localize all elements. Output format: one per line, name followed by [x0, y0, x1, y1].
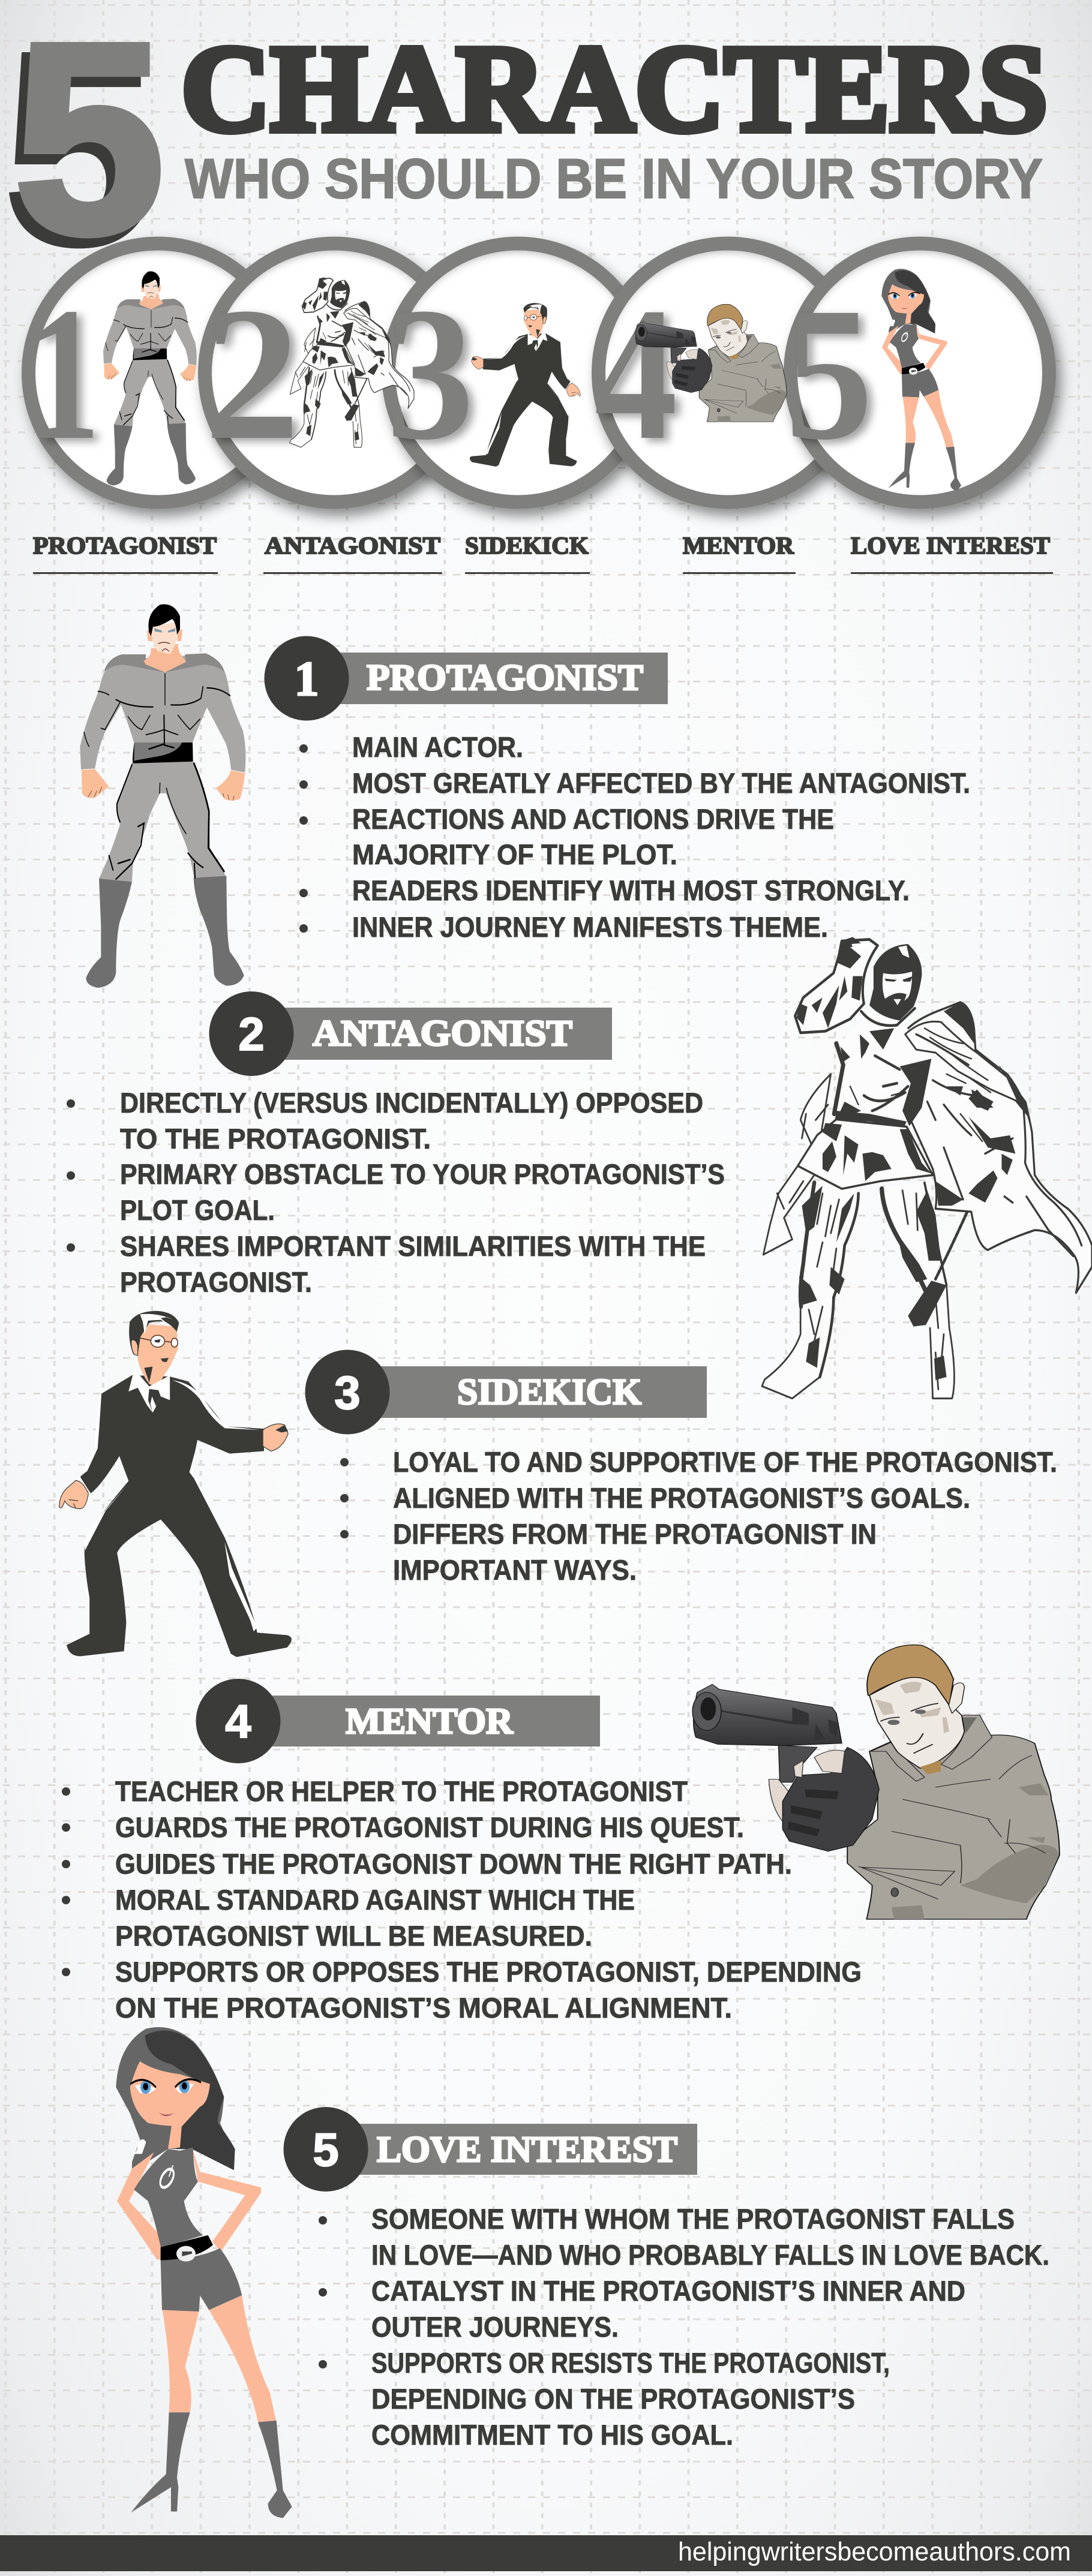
small figure: sidekick: [470, 303, 580, 467]
bullets: [67, 1099, 75, 1252]
heading: SIDEKICK: [457, 1372, 641, 1412]
text block: [115, 1775, 862, 2024]
text block: IMPORTANT WAYS.: [393, 1554, 637, 1586]
circle 3: [383, 244, 652, 513]
text block: PROTAGONIST WILL BE MEASURED.: [115, 1920, 592, 1952]
figure: protagonist: [80, 605, 245, 988]
footer url: helpingwritersbecomeauthors.com: [678, 2537, 1071, 2566]
number badge: [305, 1349, 390, 1435]
heading bar: [307, 653, 668, 704]
heading: characters: CHARACTERS: [181, 20, 1048, 157]
character labels row: MENTOR: [683, 532, 794, 559]
text block: PLOT GOAL.: [120, 1194, 275, 1226]
small figure: mentor: [635, 304, 787, 422]
text block: OUTER JOURNEYS.: [371, 2311, 619, 2343]
number badge: 2: [238, 1008, 265, 1060]
text block: SHARES IMPORTANT SIMILARITIES WITH THE: [120, 1230, 706, 1262]
text block: TO THE PROTAGONIST.: [120, 1123, 431, 1155]
character labels row: LOVE INTEREST: [851, 532, 1050, 559]
circle 4: [593, 244, 862, 513]
panel: sidekick: [305, 1349, 1057, 1586]
big numeral 5: 5: [5, 0, 155, 300]
circle 5: 5: [785, 268, 873, 479]
character labels row: ANTAGONIST: [265, 532, 440, 559]
numbered circles row: [23, 244, 1054, 513]
heading bar: [326, 2124, 697, 2175]
number badge: [264, 636, 349, 721]
bullets: [62, 1787, 70, 1976]
text block: [393, 1446, 1057, 1586]
circle 4: 4: [594, 268, 677, 479]
figure: antagonist: [762, 937, 1092, 1399]
panel: love interest: [283, 2107, 1049, 2451]
panel: antagonist: [67, 991, 725, 1298]
text block: INNER JOURNEY MANIFESTS THEME.: [352, 911, 828, 943]
circle 5: [785, 244, 1054, 513]
footer bar: [0, 2535, 1092, 2571]
figure: mentor: [692, 1645, 1060, 1919]
text block: [371, 2203, 1049, 2451]
text block: MORAL STANDARD AGAINST WHICH THE: [115, 1884, 635, 1916]
number badge: [209, 991, 294, 1076]
text block: MAIN ACTOR.: [352, 731, 523, 763]
text block: DIFFERS FROM THE PROTAGONIST IN: [393, 1518, 877, 1550]
figure: sidekick: [59, 1311, 292, 1657]
text block: GUARDS THE PROTAGONIST DURING HIS QUEST.: [115, 1811, 744, 1843]
text block: ALIGNED WITH THE PROTAGONIST’S GOALS.: [393, 1482, 970, 1514]
circle 1: 1: [28, 268, 100, 479]
text block: REACTIONS AND ACTIONS DRIVE THE: [352, 803, 834, 835]
heading: PROTAGONIST: [367, 658, 643, 698]
text block: TEACHER OR HELPER TO THE PROTAGONIST: [115, 1775, 688, 1807]
circle 2: [200, 244, 469, 513]
text block: [120, 1087, 725, 1298]
number badge: 5: [313, 2123, 339, 2176]
small figure: love interest: [881, 269, 961, 491]
circle 2: 2: [204, 268, 300, 479]
text block: DIRECTLY (VERSUS INCIDENTALLY) OPPOSED: [120, 1087, 703, 1119]
title: [5, 0, 1048, 300]
character labels row: PROTAGONIST: [33, 532, 217, 559]
heading bar: [347, 1366, 707, 1418]
small figure: antagonist: [290, 277, 414, 447]
number badge: [196, 1679, 281, 1763]
bullets: [319, 2216, 327, 2368]
text block: ON THE PROTAGONIST’S MORAL ALIGNMENT.: [115, 1992, 732, 2024]
text block: PRIMARY OBSTACLE TO YOUR PROTAGONIST’S: [120, 1158, 725, 1190]
text block: MOST GREATLY AFFECTED BY THE ANTAGONIST.: [352, 767, 970, 799]
character labels row: [33, 532, 1053, 574]
number badge: [283, 2107, 368, 2192]
bullets: [299, 744, 308, 933]
text block: CATALYST IN THE PROTAGONIST’S INNER AND: [371, 2275, 965, 2307]
heading bar: [251, 1008, 612, 1060]
heading: LOVE INTEREST: [377, 2130, 677, 2170]
text block: [352, 731, 970, 943]
bullets: [340, 1458, 349, 1538]
heading: MENTOR: [346, 1702, 514, 1742]
text block: SOMEONE WITH WHOM THE PROTAGONIST FALLS: [371, 2203, 1015, 2235]
text block: DEPENDING ON THE PROTAGONIST’S: [371, 2383, 855, 2415]
text block: PROTAGONIST.: [120, 1266, 312, 1298]
figure: love interest: [116, 2027, 292, 2518]
number badge: 3: [334, 1366, 361, 1419]
text block: MAJORITY OF THE PLOT.: [352, 838, 677, 870]
small figure: protagonist: [103, 271, 197, 486]
number badge: 4: [225, 1695, 251, 1748]
text block: READERS IDENTIFY WITH MOST STRONGLY.: [352, 874, 910, 906]
heading: ANTAGONIST: [313, 1014, 572, 1054]
circle 3: 3: [386, 268, 474, 479]
text block: COMMITMENT TO HIS GOAL.: [371, 2419, 733, 2451]
text block: GUIDES THE PROTAGONIST DOWN THE RIGHT PATH.: [115, 1848, 792, 1880]
panel: mentor: [62, 1679, 862, 2024]
circle 1: [23, 244, 292, 513]
text block: SUPPORTS OR RESISTS THE PROTAGONIST,: [371, 2347, 890, 2379]
text block: SUPPORTS OR OPPOSES THE PROTAGONIST, DEPENDING: [115, 1956, 862, 1988]
panel: protagonist: [264, 636, 970, 943]
heading bar: [238, 1696, 600, 1747]
character labels row: SIDEKICK: [465, 532, 589, 559]
number badge: 1: [294, 651, 319, 706]
